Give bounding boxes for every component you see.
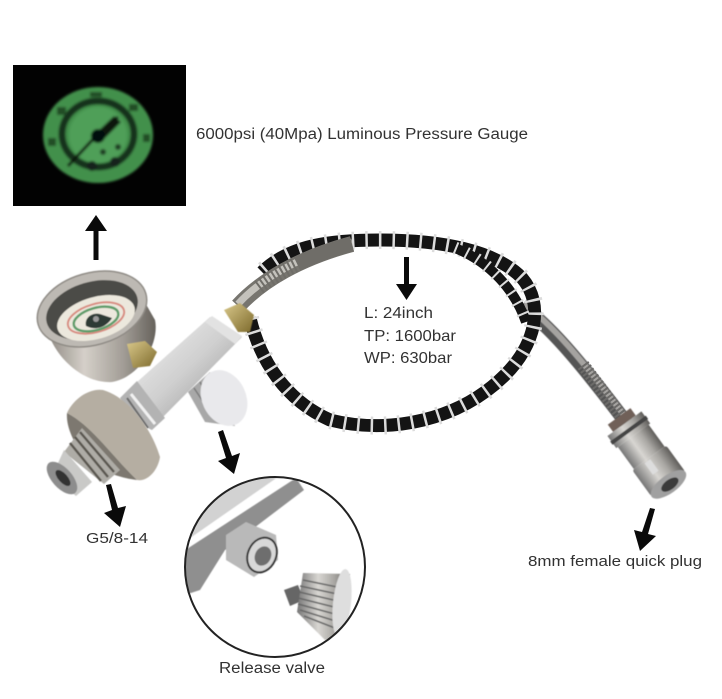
quick plug label: 8mm female quick plug — [528, 553, 702, 570]
arrow: hose — [396, 257, 417, 300]
release valve knob — [188, 372, 235, 426]
panel: luminous gauge photo — [13, 65, 186, 206]
hose specification labels — [364, 305, 457, 367]
black coiled hose — [250, 240, 535, 426]
hose specification labels: TP: 1600bar — [364, 328, 457, 345]
arrow: up to luminous gauge — [85, 215, 107, 260]
metal tube to quick plug — [522, 306, 628, 425]
hose specification labels: L: 24inch — [364, 305, 433, 322]
arrow: quick plug — [634, 508, 656, 551]
icon: pressure gauge — [28, 259, 157, 382]
panel: release valve detail circle — [170, 470, 365, 657]
brass hex fitting — [224, 303, 254, 332]
thread label: G5/8-14 — [86, 530, 148, 547]
icon: quick plug fitting — [601, 403, 692, 505]
icon: valve body — [120, 303, 256, 434]
arrow: release valve — [218, 430, 240, 474]
hose assembly — [238, 240, 630, 426]
gauge label: 6000psi (40Mpa) Luminous Pressure Gauge — [196, 126, 528, 143]
icon: threaded connector G5/8 — [41, 390, 160, 500]
second hose strand — [455, 248, 526, 322]
arrow: thread — [104, 484, 126, 527]
hose specification labels: WP: 630bar — [364, 350, 453, 367]
spring-armoured metal hose — [238, 244, 352, 306]
release valve label: Release valve — [219, 660, 325, 677]
